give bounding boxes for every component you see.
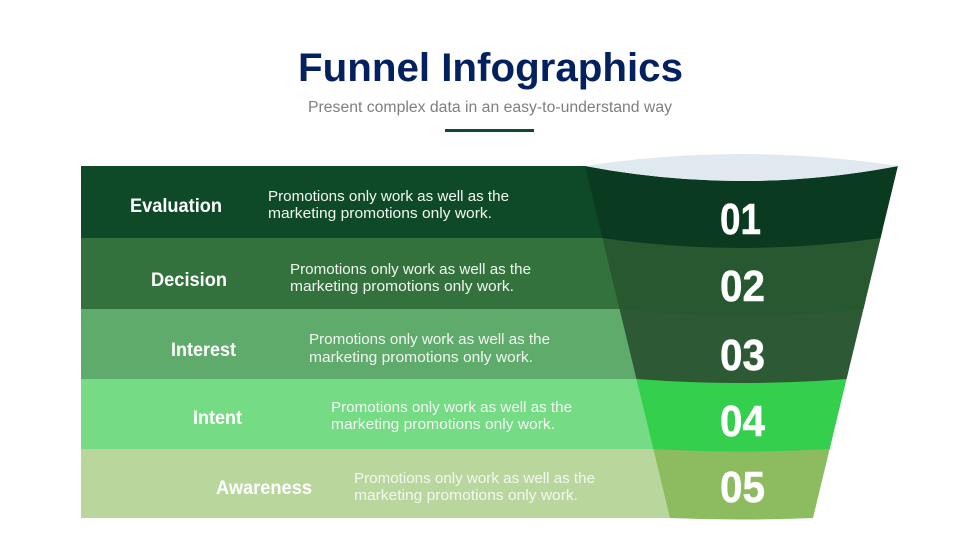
- funnel segment 02: [600, 230, 882, 308]
- accent rule: [445, 129, 534, 132]
- funnel segment 05: [651, 440, 832, 520]
- number 02: 02: [720, 262, 765, 311]
- evaluation bar: [81, 166, 605, 238]
- number 04: 04: [720, 397, 765, 446]
- evaluation label: Evaluation: [130, 196, 222, 217]
- awareness label: Awareness: [216, 478, 312, 499]
- evaluation description: Promotions only work as well as the: [268, 188, 509, 205]
- funnel opening: [585, 154, 898, 181]
- number 05: 05: [720, 463, 765, 512]
- interest description: Promotions only work as well as the: [309, 331, 550, 348]
- intent description: marketing promotions only work.: [331, 416, 555, 433]
- awareness bar: [81, 449, 672, 518]
- subtitle: Present complex data in an easy-to-understand way: [308, 99, 672, 116]
- decision description: marketing promotions only work.: [290, 278, 514, 295]
- panel: intent row: [81, 379, 656, 449]
- funnel: [585, 154, 900, 520]
- funnel segment 04: [634, 370, 849, 452]
- intent bar: [81, 379, 656, 449]
- intent description: Promotions only work as well as the: [331, 399, 572, 416]
- panel: interest row: [81, 309, 639, 379]
- awareness description: marketing promotions only work.: [354, 487, 578, 504]
- number 01: 01: [720, 195, 761, 244]
- interest label: Interest: [171, 340, 237, 361]
- funnel segments: [585, 166, 900, 520]
- awareness description: Promotions only work as well as the: [354, 470, 595, 487]
- panel: awareness row: [81, 449, 672, 518]
- decision label: Decision: [151, 270, 227, 291]
- panel: decision row: [81, 238, 622, 309]
- funnel segment 01: [585, 166, 898, 248]
- title: Funnel Infographics: [298, 46, 683, 90]
- interest description: marketing promotions only work.: [309, 349, 533, 366]
- panel: evaluation row: [81, 166, 605, 238]
- funnel segment 03: [620, 300, 866, 383]
- evaluation description: marketing promotions only work.: [268, 205, 492, 222]
- interest bar: [81, 309, 639, 379]
- intent label: Intent: [193, 408, 243, 429]
- number 03: 03: [720, 331, 765, 380]
- decision bar: [81, 238, 622, 309]
- decision description: Promotions only work as well as the: [290, 261, 531, 278]
